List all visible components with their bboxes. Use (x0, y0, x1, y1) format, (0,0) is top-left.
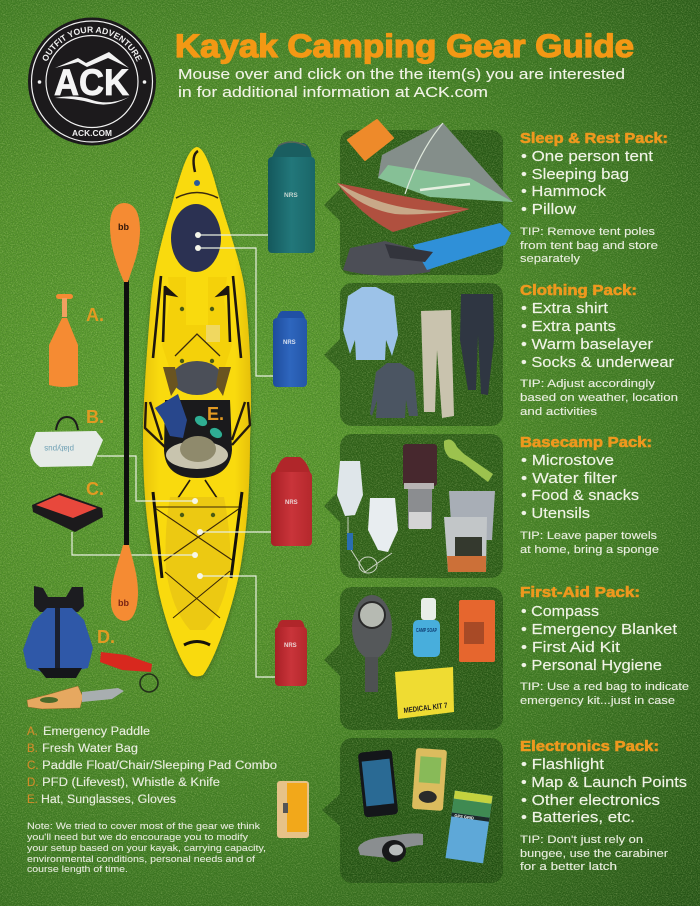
icon: emergency paddle (49, 294, 78, 387)
sleep and rest text: • Hammock (521, 183, 607, 200)
basecamp text: • Utensils (521, 505, 590, 522)
icon: small red dry bag (275, 620, 307, 686)
icon: whistle (100, 652, 158, 692)
electronics text: for a better latch (520, 861, 617, 873)
water filter bags (337, 461, 398, 573)
logo badge: ACK (54, 62, 129, 103)
clothing text: Clothing Pack: (520, 282, 637, 299)
electronics text: TIP: Don't just rely on (520, 834, 643, 846)
smartphone (358, 749, 398, 818)
first aid text: • Compass (521, 603, 599, 620)
first aid text: First-Aid Pack: (520, 584, 640, 601)
food pouches (444, 491, 495, 572)
subtitle: in for additional information at ACK.com (178, 84, 488, 101)
icon: water bag: platypus (44, 444, 74, 453)
rear deck (166, 497, 230, 630)
clothing text: • Warm baselayer (521, 336, 653, 353)
tent (378, 123, 513, 202)
title: Kayak Camping Gear Guide (175, 28, 634, 64)
first aid text: TIP: Use a red bag to indicate (520, 681, 689, 693)
icon: large red dry bag (271, 457, 312, 546)
legend: Fresh Water Bag (42, 743, 138, 755)
day hatch and mesh pads (172, 361, 222, 395)
legend: PFD (Lifevest), Whistle & Knife (42, 777, 220, 789)
icon: knife (27, 686, 124, 709)
medical kit (395, 667, 454, 719)
battery case (277, 781, 309, 838)
emergency blanket (459, 600, 495, 662)
label D: D. (97, 627, 115, 647)
label E: E. (207, 404, 224, 424)
icon: blue dry bag: NRS (283, 340, 296, 346)
leggings (460, 294, 494, 395)
clothing text: based on weather, location (520, 392, 678, 404)
note: your setup based on your kayak, carrying capacity, (27, 843, 266, 854)
label B: B. (86, 407, 104, 427)
kayak (143, 147, 251, 678)
legend: D. (27, 777, 38, 789)
spork (444, 439, 493, 482)
legend: E. (27, 794, 38, 806)
kayak bow handle (194, 151, 198, 172)
note: environmental conditions, personal needs and of (27, 854, 255, 865)
sleep and rest text: • Sleeping bag (521, 166, 629, 183)
basecamp text: • Microstove (521, 452, 614, 469)
note: you'll need but we do encourage you to modify (27, 832, 248, 843)
label A: A. (86, 305, 104, 325)
electronics text: • Flashlight (521, 756, 605, 773)
icon: green dry bag (268, 142, 315, 253)
icon: green dry bag: NRS (284, 192, 298, 199)
note: Note: We tried to cover most of the gear we think (27, 821, 260, 832)
note: course length of time. (27, 864, 128, 875)
subtitle (178, 66, 625, 101)
clothing items (343, 287, 494, 418)
sleep and rest text: separately (520, 253, 581, 265)
legend: Hat, Sunglasses, Gloves (41, 794, 176, 806)
legend: B. (27, 743, 38, 755)
camp soap (413, 598, 440, 657)
legend: A. (27, 726, 38, 738)
basecamp text: • Water filter (521, 470, 617, 487)
baselayer top (370, 363, 418, 418)
electronics text: • Other electronics (521, 792, 660, 809)
connector lines (72, 232, 276, 677)
first aid items (352, 595, 495, 719)
legend (27, 726, 277, 806)
note (27, 821, 266, 875)
first aid text: emergency kit...just in case (520, 695, 675, 707)
first aid text: • First Aid Kit (521, 639, 621, 656)
paddle (110, 203, 140, 621)
legend: Emergency Paddle (43, 726, 150, 738)
icon: blue dry bag (273, 311, 307, 387)
clothing text: • Extra shirt (521, 300, 609, 317)
sleep and rest text: • Pillow (521, 201, 576, 218)
sunglasses (192, 413, 225, 441)
electronics items (277, 748, 493, 863)
first aid text: • Emergency Blanket (521, 621, 678, 638)
electronics text (520, 738, 687, 873)
clothing text: • Socks & underwear (521, 354, 674, 371)
clothing text: • Extra pants (521, 318, 616, 335)
basecamp text: at home, bring a sponge (520, 544, 659, 556)
shirt (343, 287, 398, 360)
compass (352, 595, 392, 692)
icon: float chair pad combo (32, 493, 103, 532)
paddle: bb (118, 222, 129, 232)
legend: Paddle Float/Chair/Sleeping Pad Combo (42, 760, 277, 772)
logo badge (28, 18, 156, 146)
icon: small red dry bag: NRS (284, 643, 297, 649)
seat (164, 400, 232, 478)
hat (166, 436, 228, 469)
headlamp (358, 833, 423, 862)
sleep items (337, 120, 513, 276)
label C: C. (86, 479, 104, 499)
clothing text: and activities (520, 406, 598, 418)
map card (445, 791, 493, 863)
clothing text (520, 282, 678, 418)
sleep and rest text: from tent bag and store (520, 240, 658, 252)
sleeping bag (343, 223, 511, 276)
electronics text: • Map & Launch Points (521, 774, 687, 791)
paddle: bb (118, 598, 129, 608)
gps unit (412, 748, 447, 811)
medical kit: MEDICAL KIT 7 (403, 701, 448, 715)
sleep and rest text: • One person tent (521, 148, 654, 165)
icon: water bag (30, 417, 103, 467)
pillow (348, 120, 393, 160)
logo badge: ACK.COM (72, 128, 112, 138)
gloves (155, 394, 187, 438)
electronics text: Electronics Pack: (520, 738, 659, 755)
legend: C. (27, 760, 38, 772)
logo badge: OUTFIT YOUR ADVENTURE (42, 26, 142, 62)
hammock (337, 183, 470, 232)
sleep and rest text (520, 130, 668, 265)
electronics text: • Batteries, etc. (521, 809, 635, 826)
icon: lifevest (23, 586, 93, 678)
clothing text: TIP: Adjust accordingly (520, 378, 656, 390)
camp soap: CAMP SOAP (416, 628, 437, 634)
pants (421, 310, 454, 418)
front hatch (171, 204, 221, 272)
icon: large red dry bag: NRS (285, 500, 298, 506)
map card: GPS GRID (454, 813, 474, 821)
basecamp text: • Food & snacks (521, 487, 639, 504)
basecamp text: Basecamp Pack: (520, 434, 652, 451)
first aid text: • Personal Hygiene (521, 657, 662, 674)
sleep and rest text: TIP: Remove tent poles (520, 226, 656, 238)
first aid text (520, 584, 689, 707)
basecamp text (520, 434, 659, 556)
sleep and rest text: Sleep & Rest Pack: (520, 130, 668, 147)
electronics text: bungee, use the carabiner (520, 848, 668, 860)
microstove (403, 444, 437, 529)
basecamp items (337, 439, 495, 573)
subtitle: Mouse over and click on the the item(s) you are interested (178, 66, 625, 83)
basecamp text: TIP: Leave paper towels (520, 530, 658, 542)
